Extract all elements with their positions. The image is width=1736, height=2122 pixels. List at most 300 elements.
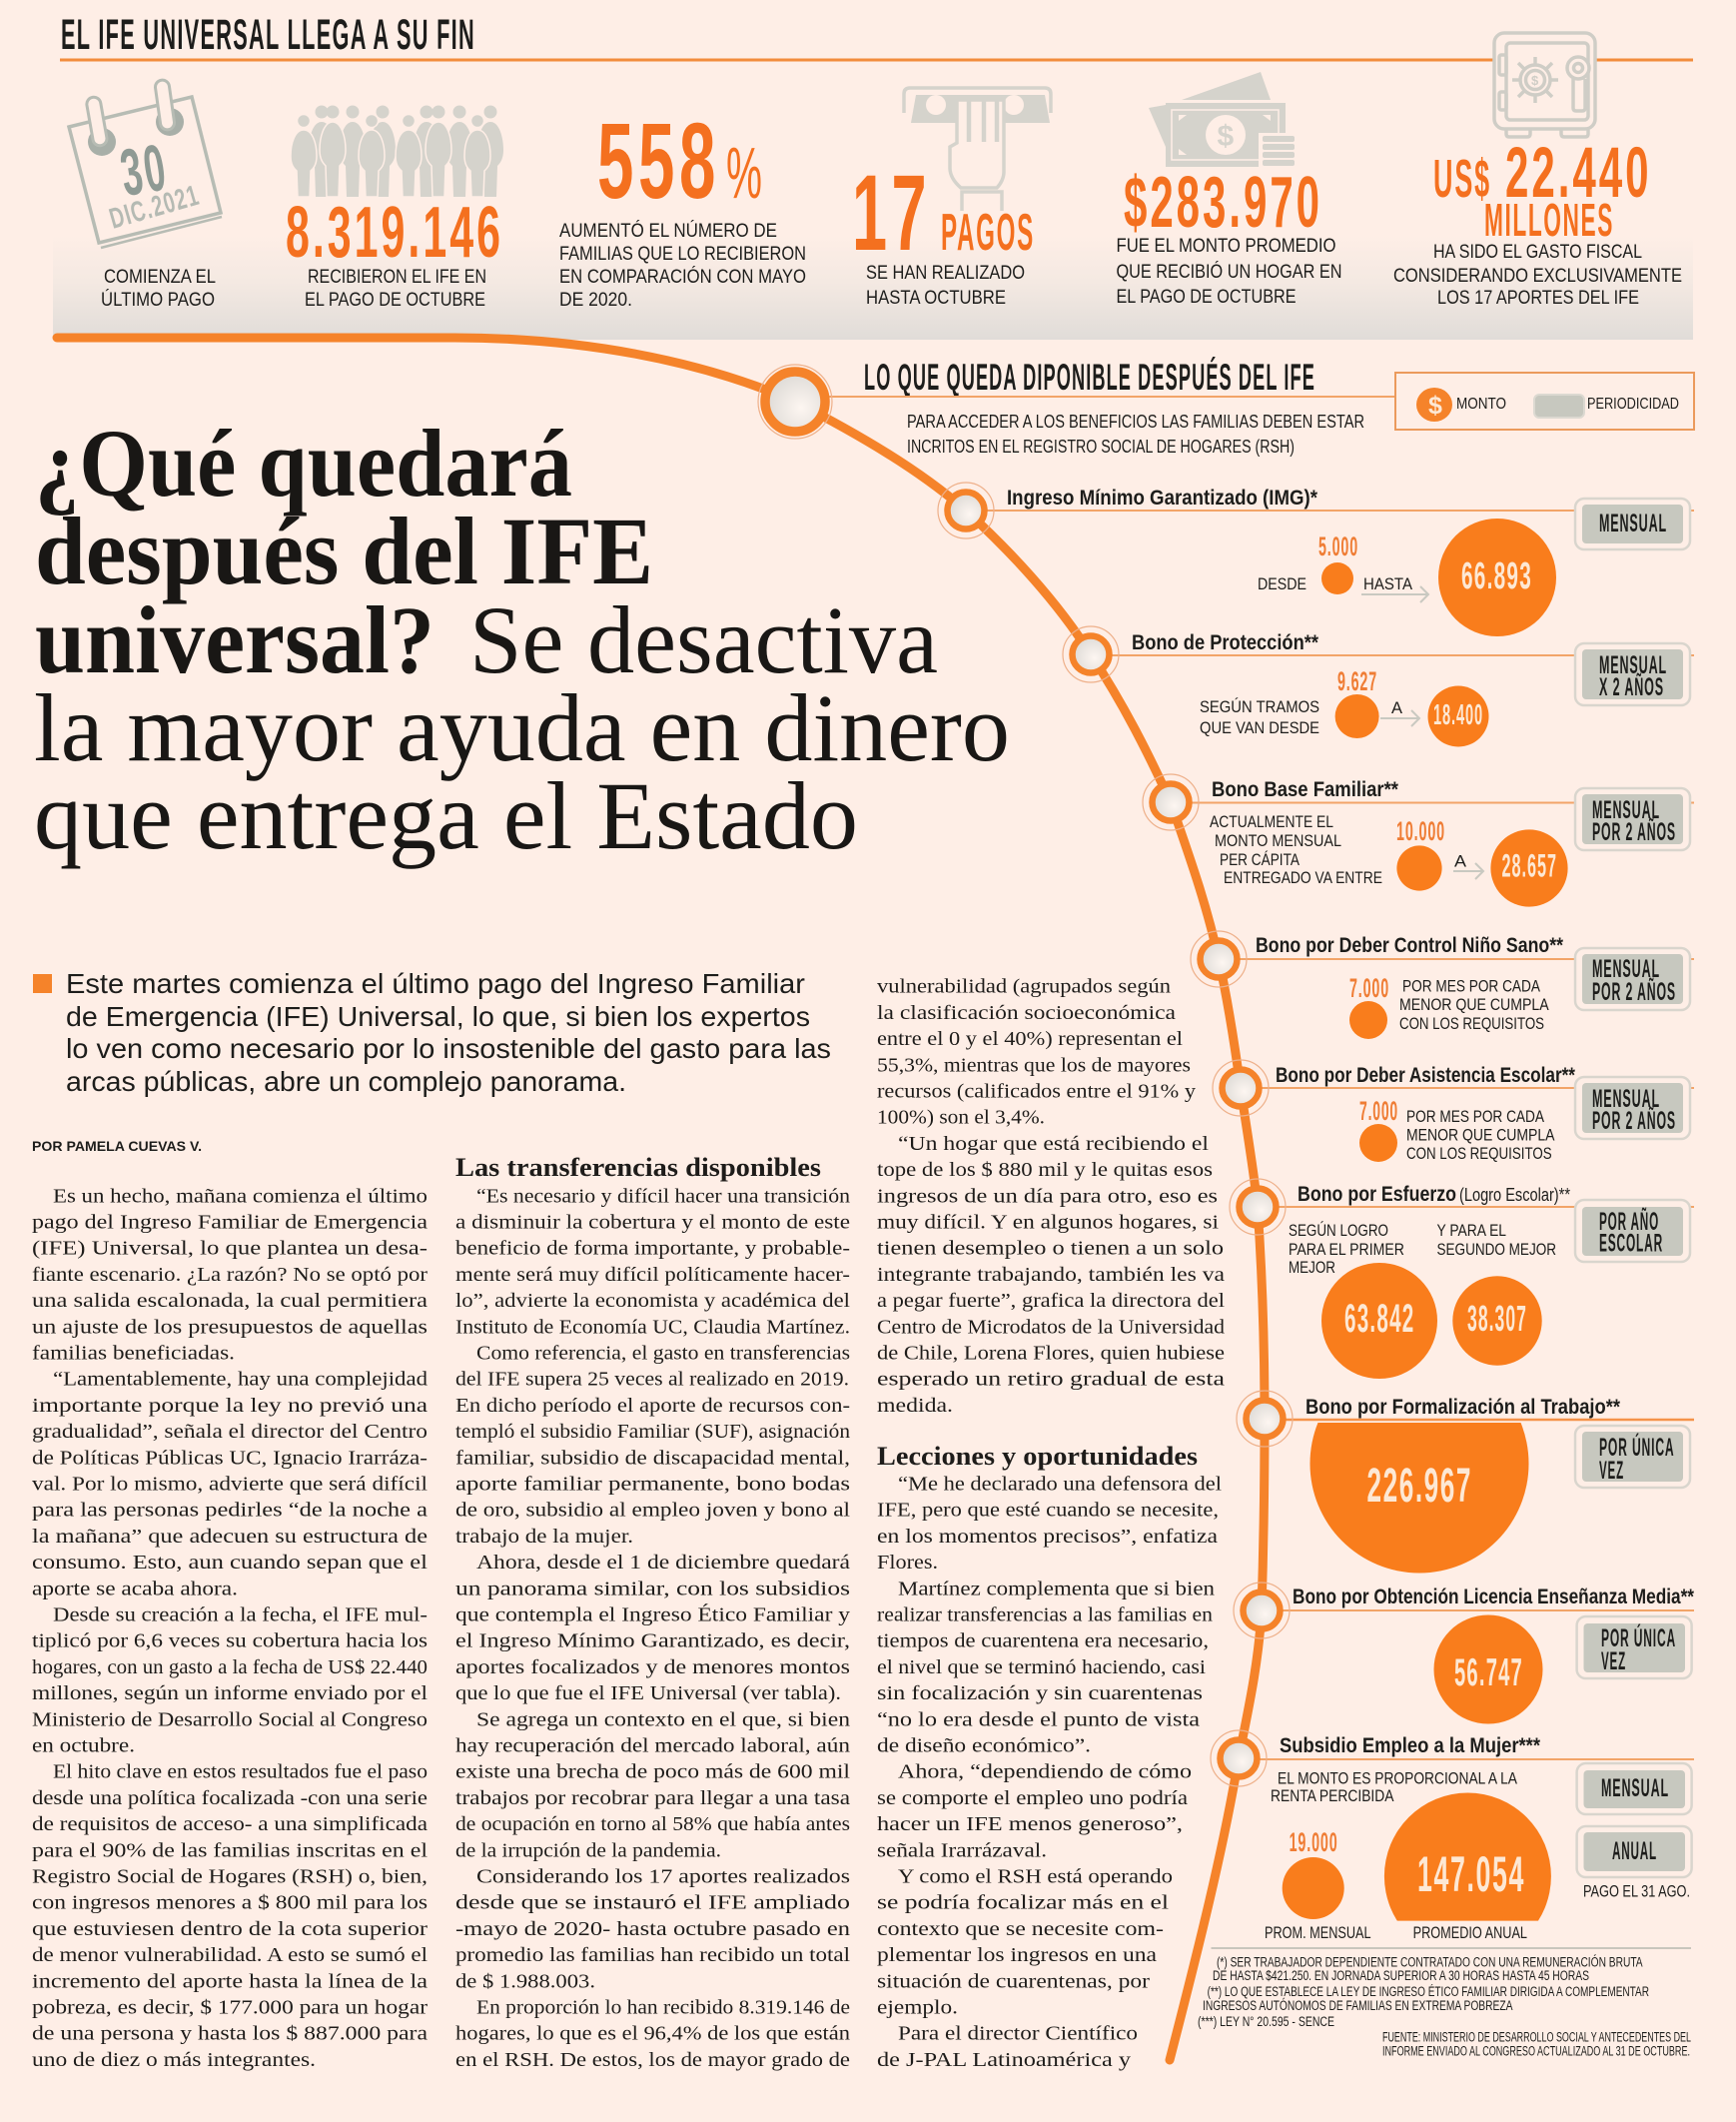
figure: US$: [1433, 149, 1491, 209]
summary paragraph: lo ven como necesario por lo insostenible del gasto para las: [66, 1033, 831, 1064]
periodicity: monthly: [1577, 1763, 1692, 1814]
article column 3: plementar los ingresos en una: [877, 1944, 1157, 1966]
benefit: Ingreso Mínimo Garantizado: [938, 483, 1694, 636]
name: Bono de Protección**: [1132, 631, 1319, 654]
article column 3: “Me he declarado una defensora del: [898, 1473, 1222, 1495]
article column 1: Desde su creación a la fecha, el IFE mul-: [53, 1604, 428, 1626]
article column 2: desde que se instauró el IFE ampliado: [455, 1892, 850, 1914]
article column 2: trabajo de la mujer.: [455, 1526, 633, 1548]
name: Bono por Deber Control Niño Sano**: [1256, 934, 1564, 957]
article column 1: desde una política focalizada -con una serie: [32, 1787, 428, 1809]
icon: calendar: 30: [116, 130, 173, 210]
article column 2: En dicho período el aporte de recursos con-: [455, 1395, 850, 1417]
amount to: [1428, 685, 1488, 747]
amount to: 66.893: [1461, 555, 1532, 597]
node: [1213, 1060, 1269, 1116]
article column 3: muy difícil. Y en algunos hogares, si: [877, 1211, 1220, 1233]
caption: [101, 266, 216, 311]
amount from: DESDE: [1258, 575, 1306, 593]
article column 3: Martínez complementa que si bien: [898, 1578, 1215, 1599]
article column 3: Y como el RSH está operando: [898, 1866, 1173, 1888]
description: MONTO MENSUAL: [1215, 832, 1341, 850]
key figure: last payment date: [69, 79, 222, 311]
arrow: [1380, 710, 1419, 726]
amount from: A: [1454, 853, 1466, 871]
article column 3: medida.: [877, 1395, 953, 1417]
amount from: 9.627: [1337, 666, 1377, 696]
article column 3: en los momentos precisos”, enfatiza: [877, 1526, 1218, 1548]
article column 2: lo”, advierte la economista y académica del: [455, 1290, 850, 1312]
article column 3: sin focalización y sin cuarentenas: [877, 1682, 1203, 1704]
key figure: 8.319.146 recipients: [286, 106, 503, 311]
legend: amount: $: [1428, 392, 1442, 420]
icon: safe: $: [1531, 73, 1539, 88]
benefit: Subsidio Empleo a la Mujer: [1211, 1730, 1694, 1960]
article column 1: la mañana” que adecuen su estructura de: [32, 1526, 428, 1548]
article column 2: que lo que fue el IFE Universal (ver tabla).: [455, 1682, 841, 1704]
article column 2: familiar, subsidio de discapacidad mental,: [455, 1447, 850, 1469]
article column 3: [877, 976, 1225, 2071]
node: [1230, 1179, 1286, 1235]
description: CON LOS REQUISITOS: [1406, 1145, 1552, 1163]
legend: amount: MONTO: [1456, 396, 1506, 413]
bullet: [33, 974, 52, 993]
name: (Logro Escolar)**: [1459, 1185, 1570, 1205]
caption: FUE EL MONTO PROMEDIO: [1117, 235, 1336, 257]
article column 1: gradualidad”, señala el director del Centro: [32, 1421, 428, 1443]
caption: LOS 17 APORTES DEL IFE: [1437, 287, 1639, 309]
summary paragraph: arcas públicas, abre un complejo panorama.: [66, 1066, 626, 1097]
requirement note: PARA ACCEDER A LOS BENEFICIOS LAS FAMILIAS DEBEN ESTAR: [907, 412, 1364, 432]
caption: EL PAGO DE OCTUBRE: [1117, 286, 1297, 308]
article column 2: un panorama similar, con los subsidios: [455, 1578, 850, 1599]
byline: POR PAMELA CUEVAS V.: [32, 1138, 202, 1154]
periodicity: [1575, 1200, 1690, 1262]
article column 3: tope de los $ 880 mil y le quitas esos: [877, 1159, 1213, 1181]
annual amount: [1384, 1792, 1551, 1938]
description: [1210, 813, 1382, 887]
amount from: [1335, 666, 1402, 738]
main headline: ¿Qué quedará: [35, 410, 572, 517]
description: first best: PARA EL PRIMER: [1289, 1241, 1404, 1259]
article column 3: “Un hogar que está recibiendo el: [898, 1133, 1210, 1155]
article column 2: existe una brecha de poco más de 600 mil: [455, 1761, 851, 1783]
article column 3: se comporte el empleo uno podría: [877, 1787, 1188, 1809]
benefit: Bono por Formalización al Trabajo: [1236, 1390, 1694, 1573]
node: [1191, 931, 1247, 987]
article column 1: de requisitos de acceso- a una simplificada: [32, 1813, 428, 1835]
article column 1: con ingresos menores a $ 800 mil para los: [32, 1892, 428, 1914]
article column 2: promedio las familias han recibido un total: [455, 1944, 851, 1966]
article column 2: de la irrupción de la pandemia.: [455, 1839, 721, 1861]
summary paragraph: Este martes comienza el último pago del Ingreso Familiar: [66, 968, 805, 999]
article column 1: uno de diez o más integrantes.: [32, 2049, 316, 2071]
article column 3: entre el 0 y el 40%) representan el: [877, 1028, 1183, 1050]
icon: crowd of people: [291, 106, 503, 197]
description: POR MES POR CADA: [1406, 1108, 1544, 1126]
arrow: [1453, 863, 1483, 879]
arrow: [1361, 586, 1428, 602]
amount to: [1490, 829, 1568, 907]
description: [1406, 1108, 1554, 1163]
subheading: Lecciones y oportunidades: Lecciones y oportunidades: [877, 1442, 1198, 1471]
caption: QUE RECIBIÓ UN HOGAR EN: [1117, 260, 1342, 283]
periodicity: X 2 AÑOS: [1599, 671, 1664, 701]
gradient band behind key figures: [53, 235, 1693, 340]
key figure: $283.970: [1117, 72, 1342, 308]
article column 3: hacer un IFE menos generoso”,: [877, 1813, 1183, 1835]
node: [1211, 1730, 1267, 1786]
periodicity: MENSUAL: [1592, 955, 1660, 983]
timeline node: start: [758, 365, 832, 439]
article column 3: de diseño económico”.: [877, 1734, 1091, 1756]
article column 1: Ministerio de Desarrollo Social al Congreso: [32, 1708, 428, 1730]
main headline: la mayor ayuda en dinero: [34, 674, 1010, 781]
amount second: [1452, 1276, 1542, 1366]
periodicity: annual: ANUAL: [1612, 1837, 1657, 1865]
article column 1: de una persona y hasta los $ 887.000 para: [32, 2023, 428, 2045]
icon: calendar: [69, 79, 222, 248]
article column 2: [455, 1153, 851, 2071]
article column 2: Como referencia, el gasto en transferencias: [476, 1343, 850, 1365]
description: [1399, 977, 1549, 1033]
caption: HASTA OCTUBRE: [866, 287, 1006, 309]
main headline: universal?: [35, 586, 434, 693]
icon: safe: [1494, 33, 1595, 137]
icon: calendar: DIC.2021: [106, 180, 203, 236]
caption: [305, 266, 486, 311]
article column 3: integrante trabajando, también les va: [877, 1264, 1225, 1286]
description: ACTUALMENTE EL: [1210, 813, 1333, 831]
periodicity: POR AÑO: [1599, 1206, 1659, 1236]
description: PER CÁPITA: [1220, 850, 1300, 869]
benefit: Bono por Deber Asistencia Escolar: [1213, 1060, 1694, 1163]
source: [1382, 2030, 1691, 2059]
periodicity: [1575, 1426, 1690, 1488]
amount from: [1396, 816, 1466, 891]
description: MENOR QUE CUMPLA: [1399, 996, 1549, 1014]
annual amount: PROMEDIO ANUAL: [1413, 1924, 1527, 1942]
caption: EL PAGO DE OCTUBRE: [305, 289, 485, 311]
article column 2: beneficio de forma importante, y probable-: [455, 1238, 850, 1260]
monthly amount: [1265, 1827, 1371, 1942]
article column 3: la clasificación socioeconómica: [877, 1002, 1176, 1024]
legend: periodicity: PERIODICIDAD: [1587, 396, 1679, 413]
article column 1: [32, 1185, 429, 2071]
amount second: 38.307: [1467, 1298, 1527, 1339]
amount to: 18.400: [1433, 699, 1483, 731]
name: Ingreso Mínimo Garantizado (IMG)*: [1007, 487, 1318, 510]
figure: [1433, 134, 1652, 246]
legend: amount: [1416, 388, 1506, 422]
icon: banknotes and coins: $: [1217, 120, 1235, 153]
icon: banknotes and coins: [1149, 72, 1297, 168]
node: [1237, 1391, 1293, 1447]
description: MENOR QUE CUMPLA: [1406, 1127, 1554, 1145]
caption: [866, 262, 1025, 309]
amount: 56.747: [1454, 1651, 1523, 1694]
amount to: 28.657: [1502, 847, 1557, 883]
description: first best: [1289, 1221, 1404, 1277]
article column 1: Registro Social de Hogares (RSH) o, bien,: [32, 1866, 428, 1888]
article column 3: a pegar fuerte”, grafica la directora del: [877, 1290, 1225, 1312]
caption: RECIBIERON EL IFE EN: [308, 266, 486, 288]
article column 3: realizar transferencias a las familias en: [877, 1604, 1213, 1626]
orange timeline curve: [57, 338, 1265, 2060]
article column 2: que contempla el Ingreso Ético Familiar y: [455, 1602, 850, 1626]
name: [1298, 1183, 1570, 1206]
periodicity: [1575, 499, 1690, 549]
summary paragraph: de Emergencia (IFE) Universal, lo que, si bien los expertos: [66, 1001, 810, 1032]
periodicity: VEZ: [1599, 1457, 1624, 1485]
article column 3: “no lo era desde el punto de vista: [877, 1708, 1200, 1730]
monthly amount: PROM. MENSUAL: [1265, 1924, 1371, 1942]
article column 3: Flores.: [877, 1552, 938, 1574]
amount: 7.000: [1349, 973, 1389, 1003]
article column 2: de $ 1.988.003.: [455, 1970, 595, 1992]
article column 1: hogares, con un gasto a la fecha de US$ 22.440: [32, 1656, 428, 1678]
article column 2: -mayo de 2020- hasta octubre pasado en: [455, 1918, 850, 1940]
section heading: El IFE universal llega a su fin: [60, 11, 1693, 62]
name: Bono por Deber Asistencia Escolar**: [1276, 1064, 1576, 1087]
article column 1: millones, según un informe enviado por el: [32, 1682, 429, 1704]
description: second best: SEGUNDO MEJOR: [1436, 1241, 1556, 1259]
monthly amount: 19.000: [1290, 1827, 1338, 1857]
node: [1143, 774, 1199, 830]
article column 3: vulnerabilidad (agrupados según: [877, 976, 1171, 998]
article column 2: el Ingreso Mínimo Garantizado, es decir,: [455, 1630, 850, 1652]
article column 2: En proporción lo han recibido 8.319.146 de: [476, 1996, 850, 2018]
article column 2: mente será muy difícil políticamente hacer-: [455, 1264, 850, 1286]
article column 2: Instituto de Economía UC, Claudia Martínez.: [455, 1316, 850, 1338]
amount: 226.967: [1366, 1460, 1472, 1513]
amount: [1434, 1614, 1542, 1724]
summary paragraph: [33, 968, 831, 1097]
article column 3: esperado un retiro gradual de esta: [877, 1369, 1225, 1391]
article column 2: a disminuir la cobertura y el monto de este: [455, 1211, 850, 1233]
legend: periodicity: [1534, 395, 1679, 418]
article column 3: situación de cuarentenas, por: [877, 1970, 1150, 1992]
article column 2: de oro, subsidio al empleo joven y bono al: [455, 1500, 851, 1522]
caption: [1117, 235, 1342, 308]
article column 3: tiempos de cuarentena era necesario,: [877, 1630, 1209, 1652]
article column 1: “Lamentablemente, hay una complejidad: [53, 1369, 428, 1391]
amount from: HASTA: [1363, 575, 1412, 593]
description: second best: [1436, 1222, 1556, 1259]
article column 2: Considerando los 17 aportes realizados: [476, 1866, 850, 1888]
periodicity: [1575, 788, 1690, 850]
periodicity: MENSUAL: [1599, 651, 1667, 679]
description: second best: Y PARA EL: [1436, 1222, 1506, 1240]
article column 1: que estuviesen dentro de la cota superior: [32, 1918, 428, 1940]
amount from: 5.000: [1318, 531, 1358, 561]
article column 1: aporte se acaba ahora.: [32, 1578, 238, 1599]
requirement note: [907, 412, 1364, 457]
caption: DE 2020.: [559, 289, 632, 311]
caption: SE HAN REALIZADO: [866, 262, 1025, 284]
benefit: Bono por Esfuerzo: [1230, 1179, 1694, 1379]
article column 1: de menor vulnerabilidad. A esto se sumó el: [32, 1944, 429, 1966]
article column 2: de ocupación en torno al 58% que había antes: [455, 1813, 850, 1835]
article column 3: IFE, pero que esté cuando se necesite,: [877, 1500, 1219, 1522]
description: SEGÚN TRAMOS: [1200, 697, 1319, 716]
article column 1: Es un hecho, mañana comienza el último: [53, 1185, 428, 1207]
article column 2: en el RSH. De estos, los de mayor grado de: [455, 2049, 850, 2071]
caption: ÚLTIMO PAGO: [101, 288, 215, 311]
article column 3: se podría focalizar más en el: [877, 1892, 1170, 1914]
amount: 7.000: [1359, 1096, 1398, 1126]
amount first: [1321, 1263, 1437, 1379]
amount: [1359, 1096, 1398, 1162]
periodicity: monthly: MENSUAL: [1601, 1774, 1669, 1802]
caption: EN COMPARACIÓN CON MAYO: [559, 265, 806, 288]
article column 2: aportes focalizados y de menores montos: [455, 1656, 850, 1678]
article column 3: ejemplo.: [877, 1996, 958, 2018]
icon: hand taking cash from slot: [904, 88, 1051, 211]
article column 1: de Políticas Públicas UC, Ignacio Irarráza-: [32, 1447, 428, 1469]
caption: [1393, 241, 1682, 309]
benefit: Bono por Obtención Licencia Enseñanza Media: [1234, 1583, 1695, 1724]
amount to: [1438, 519, 1556, 636]
article column 3: 55,3%, mientras que los de mayores: [877, 1054, 1191, 1076]
periodicity: VEZ: [1601, 1647, 1626, 1675]
footnotes: (***) LEY N° 20.595 - SENCE: [1198, 2014, 1334, 2029]
periodicity: [1575, 1077, 1690, 1139]
article column 2: trabajos por recobrar para llegar a una tasa: [455, 1787, 850, 1809]
article column 1: familias beneficiadas.: [32, 1343, 235, 1365]
article column 1: una salida escalonada, la cual permitiera: [32, 1290, 428, 1312]
article column 1: incremento del aporte hasta la línea de la: [32, 1970, 428, 1992]
periodicity: MENSUAL: [1592, 796, 1660, 824]
article column 1: tiplicó por 6,6 veces su cobertura hacia los: [32, 1630, 428, 1652]
periodicity: [1575, 643, 1690, 705]
main headline: después del IFE: [35, 498, 653, 604]
benefit: Bono Base Familiar: [1143, 774, 1694, 907]
amount: [1310, 1423, 1528, 1573]
description: QUE VAN DESDE: [1200, 719, 1319, 737]
description: [1200, 697, 1319, 737]
caption: CONSIDERANDO EXCLUSIVAMENTE: [1393, 265, 1682, 287]
requirement note: INCRITOS EN EL REGISTRO SOCIAL DE HOGARES (RSH): [907, 437, 1295, 457]
description: first best: SEGÚN LOGRO: [1289, 1221, 1388, 1240]
figure: 8.319.146: [286, 193, 503, 273]
name: Subsidio Empleo a la Mujer***: [1280, 1734, 1541, 1757]
footnotes: DE HASTA $421.250. EN JORNADA SUPERIOR A 30 HORAS HASTA 45 HORAS: [1213, 1968, 1589, 1983]
article column 3: Ahora, “dependiendo de cómo: [898, 1761, 1192, 1783]
caption: [559, 219, 806, 311]
article column 1: importante porque la ley no previó una: [32, 1395, 428, 1417]
description: EL MONTO ES PROPORCIONAL A LA: [1278, 1770, 1517, 1788]
article column 1: consumo. Esto, aun cuando sepan que el: [32, 1552, 429, 1574]
annual amount: 147.054: [1417, 1846, 1525, 1902]
article column 2: “Es necesario y difícil hacer una transición: [476, 1185, 850, 1207]
name: Bono por Formalización al Trabajo**: [1305, 1396, 1621, 1419]
article column 3: de J-PAL Latinoamérica y: [877, 2049, 1131, 2071]
benefit: Bono de Protección: [1063, 626, 1694, 747]
article column 3: contexto que se necesite com-: [877, 1918, 1164, 1940]
key figure: US$ 22.440 millones: [1393, 33, 1682, 309]
periodicity: MENSUAL: [1599, 510, 1667, 537]
article column 2: hay recuperación del mercado laboral, aún: [455, 1734, 850, 1756]
article column 1: pago del Ingreso Familiar de Emergencia: [32, 1211, 428, 1233]
periodicity: annual: [1577, 1826, 1692, 1877]
article column 3: de Chile, Lorena Flores, quien hubiese: [877, 1343, 1225, 1365]
amount from: A: [1391, 699, 1402, 717]
article column 1: pobreza, es decir, $ 177.000 para un hogar: [32, 1996, 428, 2018]
periodicity: ESCOLAR: [1599, 1229, 1663, 1257]
caption: AUMENTÓ EL NÚMERO DE: [559, 219, 777, 242]
payment date note: PAGO EL 31 AGO.: [1583, 1883, 1690, 1901]
description: CON LOS REQUISITOS: [1399, 1015, 1544, 1033]
article column 3: ingresos de un día para otro, eso es: [877, 1185, 1218, 1207]
benefit: Bono por Deber Control Niño Sano: [1191, 931, 1694, 1039]
description: [1271, 1770, 1517, 1805]
article column 3: señala Irarrázaval.: [877, 1839, 1047, 1861]
caption: HA SIDO EL GASTO FISCAL: [1433, 241, 1642, 263]
description: ENTREGADO VA ENTRE: [1224, 869, 1382, 887]
periodicity: MENSUAL: [1592, 1085, 1660, 1113]
subheading: Las transferencias disponibles: Las transferencias disponibles: [455, 1153, 821, 1182]
amount from: [1258, 531, 1412, 594]
article column 3: 100%) son el 3,4%.: [877, 1107, 1045, 1129]
key figure: 558%: [559, 100, 806, 311]
article column 1: El hito clave en estos resultados fue el paso: [53, 1761, 428, 1783]
caption: COMIENZA EL: [104, 266, 216, 288]
article column 1: (IFE) Universal, lo que plantea un desa-: [32, 1238, 428, 1260]
amount: [1349, 973, 1389, 1039]
article column 3: tienen desempleo o tienen a un solo: [877, 1238, 1224, 1260]
name: Bono por Esfuerzo: [1298, 1183, 1456, 1206]
article column 1: para las personas pedirles “de la noche a: [32, 1500, 428, 1522]
node: [1234, 1583, 1290, 1638]
key figure: 17 pagos: PAGOS: [941, 204, 1035, 262]
footnotes: INGRESOS AUTÓNOMOS DE FAMILIAS EN EXTREMA POBREZA: [1203, 1998, 1512, 2013]
article column 3: Para el director Científico: [898, 2023, 1138, 2045]
caption: FAMILIAS QUE LO RECIBIERON: [559, 243, 806, 265]
node: [938, 483, 994, 538]
amount from: 10.000: [1396, 816, 1445, 846]
main headline: Se desactiva: [469, 586, 938, 693]
periodicity: [1577, 1616, 1692, 1678]
main headline: que entrega el Estado: [34, 762, 858, 869]
article column 2: Se agrega un contexto en el que, si bien: [476, 1708, 850, 1730]
article column 2: aporte familiar permanente, bono bodas: [455, 1473, 850, 1495]
description: first best: MEJOR: [1289, 1259, 1335, 1277]
article column 2: Ahora, desde el 1 de diciembre quedará: [476, 1552, 850, 1574]
article column 3: el nivel que se terminó haciendo, casi: [877, 1656, 1206, 1678]
article column 2: del IFE supera 25 veces al realizado en 2019.: [455, 1369, 849, 1391]
figure: 558: [597, 100, 720, 221]
description: RENTA PERCIBIDA: [1271, 1787, 1394, 1805]
name: Bono Base Familiar**: [1212, 778, 1399, 801]
article column 3: recursos (calificados entre el 91% y: [877, 1081, 1196, 1103]
amount first: 63.842: [1344, 1297, 1414, 1341]
description: POR MES POR CADA: [1402, 977, 1540, 995]
article column 2: templó el subsidio Familiar (SUF), asignación: [455, 1421, 850, 1443]
article column 3: Centro de Microdatos de la Universidad: [877, 1316, 1225, 1338]
section heading: El IFE universal llega a su fin: EL IFE UNIVERSAL LLEGA A SU FIN: [61, 11, 475, 59]
legend: [1395, 373, 1694, 430]
key figure: 17 pagos: [852, 88, 1051, 309]
article column 1: en octubre.: [32, 1734, 135, 1756]
article column 1: para el 90% de las familias inscritas en el: [32, 1839, 429, 1861]
figure: %: [726, 134, 762, 214]
article column 1: fiante escenario. ¿La razón? No se optó por: [32, 1264, 428, 1286]
article column 1: un ajuste de los presupuestos de aquellas: [32, 1316, 428, 1338]
footnotes: [1198, 1947, 1691, 2029]
main headline: [34, 410, 1010, 869]
article column 1: val. Por lo mismo, advierte que será difícil: [32, 1473, 429, 1495]
